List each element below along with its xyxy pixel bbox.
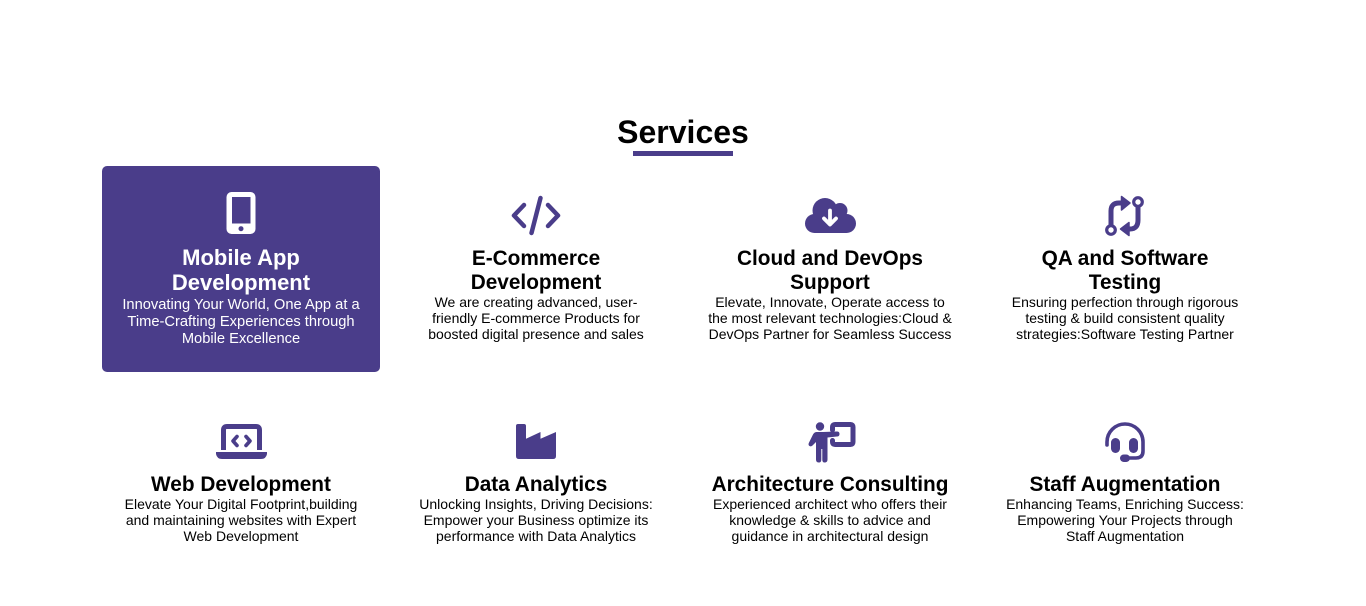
- heading: Testing: [1089, 271, 1161, 294]
- description: Web Development: [184, 528, 298, 544]
- panel: Staff Augmentation: [1006, 422, 1244, 544]
- description: Ensuring perfection through rigorous: [1012, 294, 1238, 310]
- description: Elevate Your Digital Footprint,building: [125, 496, 357, 512]
- description: [419, 496, 653, 544]
- description: boosted digital presence and sales: [428, 326, 644, 342]
- heading: QA and Software: [1042, 247, 1208, 270]
- description: knowledge & skills to advice and: [729, 512, 931, 528]
- panel: Data Analytics: [419, 424, 653, 544]
- description: Experienced architect who offers their: [713, 496, 947, 512]
- heading: [1042, 247, 1208, 294]
- description: Innovating Your World, One App at a: [122, 297, 360, 313]
- icon: cloud download: [805, 198, 856, 233]
- heading: Data Analytics: [465, 473, 607, 496]
- description: and maintaining websites with Expert: [126, 512, 356, 528]
- heading: Development: [172, 270, 310, 295]
- description: [1012, 294, 1238, 342]
- description: [713, 496, 947, 544]
- icon: factory: [516, 424, 556, 459]
- description: We are creating advanced, user-: [435, 294, 637, 310]
- description: [125, 496, 357, 544]
- panel: Cloud and DevOps Support: [708, 198, 952, 342]
- heading: [172, 245, 310, 295]
- heading: Web Development: [151, 473, 331, 496]
- description: performance with Data Analytics: [436, 528, 636, 544]
- panel: QA and Software Testing: [1012, 196, 1238, 342]
- description: strategies:Software Testing Partner: [1016, 326, 1234, 342]
- title: Services: [617, 114, 749, 150]
- title underline: [633, 151, 733, 156]
- description: Empower your Business optimize its: [424, 512, 648, 528]
- description: [428, 294, 644, 342]
- heading: E-Commerce: [472, 247, 600, 270]
- heading: Mobile App: [182, 245, 300, 270]
- icon: code: [512, 196, 560, 236]
- description: Elevate, Innovate, Operate access to: [715, 294, 945, 310]
- icon: laptop code: [216, 424, 267, 459]
- heading: [471, 247, 602, 294]
- panel: Architecture Consulting: [712, 422, 948, 544]
- description: friendly E-commerce Products for: [432, 310, 640, 326]
- icon: headset: [1105, 422, 1145, 462]
- description: DevOps Partner for Seamless Success: [709, 326, 951, 342]
- panel: Mobile App Development: [102, 166, 380, 372]
- description: Unlocking Insights, Driving Decisions:: [419, 496, 653, 512]
- heading: Support: [790, 271, 870, 294]
- description: Mobile Excellence: [182, 331, 300, 347]
- description: testing & build consistent quality: [1025, 310, 1225, 326]
- icon: mobile phone: [226, 192, 256, 234]
- panel: Web Development: [125, 424, 357, 544]
- panel: E-Commerce Development: [428, 196, 644, 342]
- description: Enhancing Teams, Enriching Success:: [1006, 496, 1244, 512]
- heading: [737, 247, 923, 294]
- description: Empowering Your Projects through: [1017, 512, 1233, 528]
- heading: Architecture Consulting: [712, 473, 948, 496]
- description: the most relevant technologies:Cloud &: [708, 310, 952, 326]
- description: Time-Crafting Experiences through: [127, 314, 355, 330]
- heading: Staff Augmentation: [1029, 473, 1220, 496]
- icon: presenter at board: [808, 422, 856, 462]
- description: [708, 294, 952, 342]
- description: [1006, 496, 1244, 544]
- description: [122, 297, 360, 347]
- description: Staff Augmentation: [1066, 528, 1184, 544]
- description: guidance in architectural design: [732, 528, 928, 544]
- heading: Development: [471, 271, 601, 294]
- icon: code compare arrows: [1105, 196, 1144, 236]
- heading: Cloud and DevOps: [737, 247, 923, 270]
